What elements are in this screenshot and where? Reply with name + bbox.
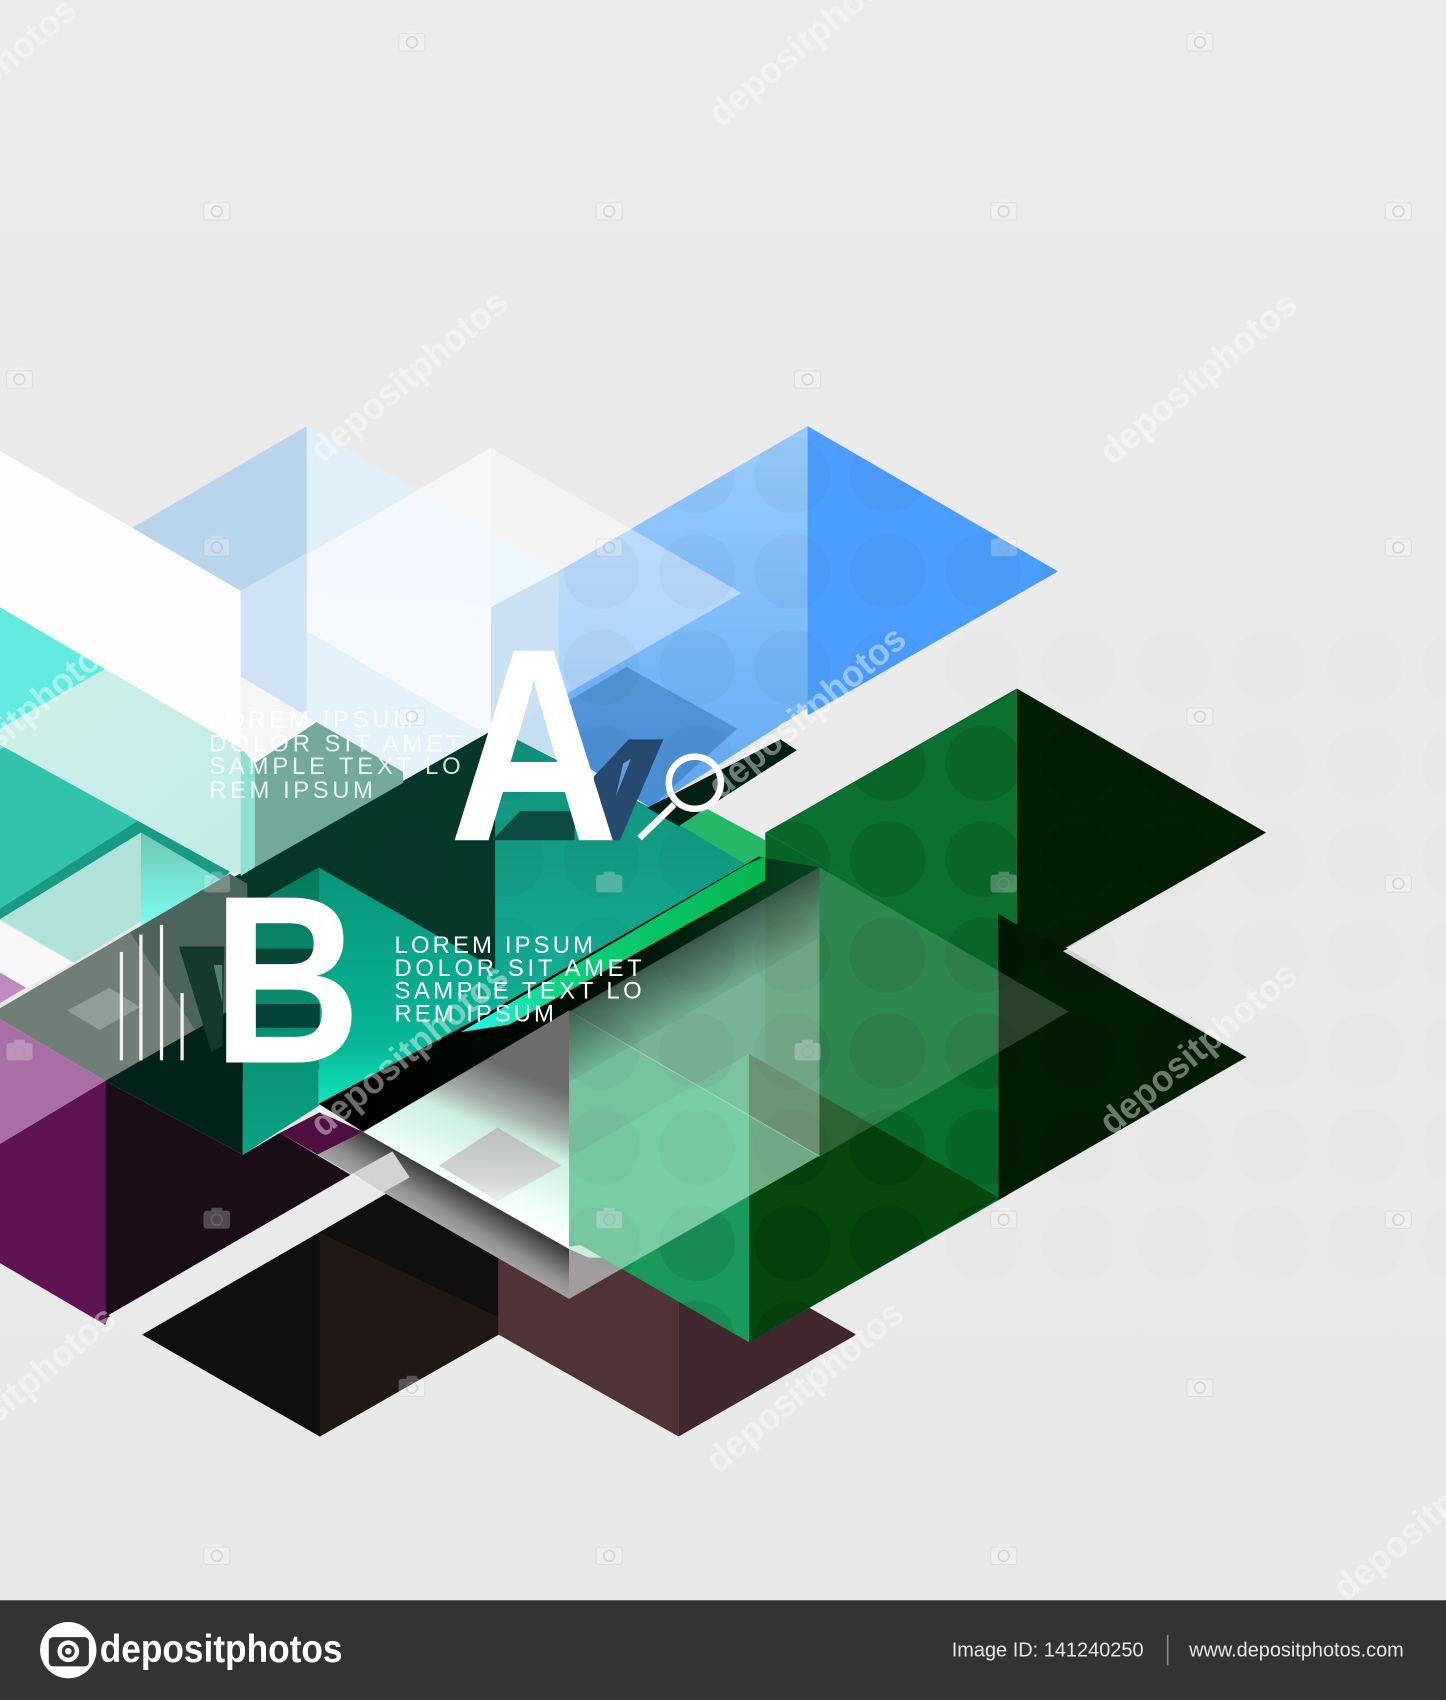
pale triangle right	[141, 833, 222, 930]
watermarks: depositphotos	[302, 281, 516, 470]
dark strip under blue	[647, 739, 797, 826]
logo wordmark: depositphotos	[100, 1628, 343, 1671]
light gap band	[108, 1151, 410, 1335]
bright green stripe	[461, 857, 765, 1032]
lower green diamond	[749, 833, 1247, 1342]
text block A	[209, 706, 461, 804]
gray translucent band	[0, 874, 247, 1081]
faint circle pattern on background	[943, 629, 1446, 1301]
icon: camera logo	[40, 1622, 96, 1678]
text block B: LOREM IPSUM	[395, 932, 593, 959]
circle pattern on blue	[488, 379, 1138, 835]
pink wedge	[0, 973, 26, 1003]
central teal diamond	[222, 729, 765, 1084]
small gray diamond	[439, 1128, 561, 1201]
blue diamond	[558, 426, 1058, 808]
image id: Image ID: 141240250	[952, 1640, 1144, 1662]
pale blue diamond	[57, 426, 557, 716]
watermarks: depositphotos	[700, 617, 914, 806]
black diamond	[142, 1193, 499, 1437]
white band continuation	[241, 677, 317, 763]
text block B: SAMPLE TEXT LO	[395, 978, 642, 1005]
circle pattern on green	[622, 691, 1258, 1334]
purple diamond	[0, 1081, 353, 1325]
text block A: LOREM IPSUM	[209, 706, 413, 733]
left teal and white shapes	[0, 451, 403, 1144]
text block A: REM IPSUM	[209, 777, 373, 804]
text block B	[395, 932, 642, 1027]
shapes: back row dark diamonds	[0, 1081, 856, 1437]
translucent diamond lower	[363, 1010, 819, 1299]
letter shadow B	[179, 946, 320, 1052]
shadow on upper edge	[569, 867, 819, 1082]
pale blue lower area	[241, 571, 558, 783]
dark green wedge	[105, 1003, 243, 1155]
circle pattern on teal	[238, 716, 780, 1052]
black band	[319, 857, 819, 1132]
teal diamond behind B	[243, 867, 495, 1155]
purple sliver	[280, 1112, 363, 1155]
watermarks: depositphotos	[1091, 953, 1305, 1142]
dark teal strip	[0, 821, 230, 919]
letter shadow A	[492, 739, 663, 840]
light green tip	[677, 809, 765, 871]
pale teal diamond	[0, 669, 241, 874]
translucent white diamond	[241, 448, 741, 759]
turquoise wedge	[0, 607, 105, 732]
upper green diamond	[765, 688, 1266, 976]
pale triangle left	[0, 833, 141, 963]
footer bar	[0, 1600, 1446, 1700]
watermarks: depositphotos	[1091, 283, 1305, 472]
heading letter A: A	[449, 592, 619, 899]
text block A: DOLOR SIT AMET	[209, 730, 461, 757]
watermarks: depositphotos	[302, 956, 516, 1145]
icon: magnifier	[640, 757, 721, 838]
white band	[0, 451, 241, 748]
text block A: SAMPLE TEXT LO	[209, 753, 461, 780]
brown diamond	[499, 1233, 856, 1437]
lines chart icon	[120, 925, 184, 1060]
pink panel	[0, 1019, 105, 1144]
heading letter B: B	[212, 845, 361, 1114]
gray teal overlap	[241, 722, 403, 876]
green base under translucent panes	[569, 867, 765, 1247]
watermarks: depositphotos	[697, 1292, 911, 1481]
white wedge	[0, 922, 74, 988]
translucent diamond upper	[569, 867, 1069, 1157]
teal panel	[0, 745, 138, 909]
footer divider	[1167, 1635, 1169, 1665]
text block B: DOLOR SIT AMET	[395, 955, 642, 982]
text block B: REM IPSUM	[395, 1000, 554, 1027]
website url: www.depositphotos.com	[1188, 1640, 1404, 1662]
lowest green diamond	[499, 1054, 999, 1342]
gray band under white wedge	[318, 1132, 618, 1299]
